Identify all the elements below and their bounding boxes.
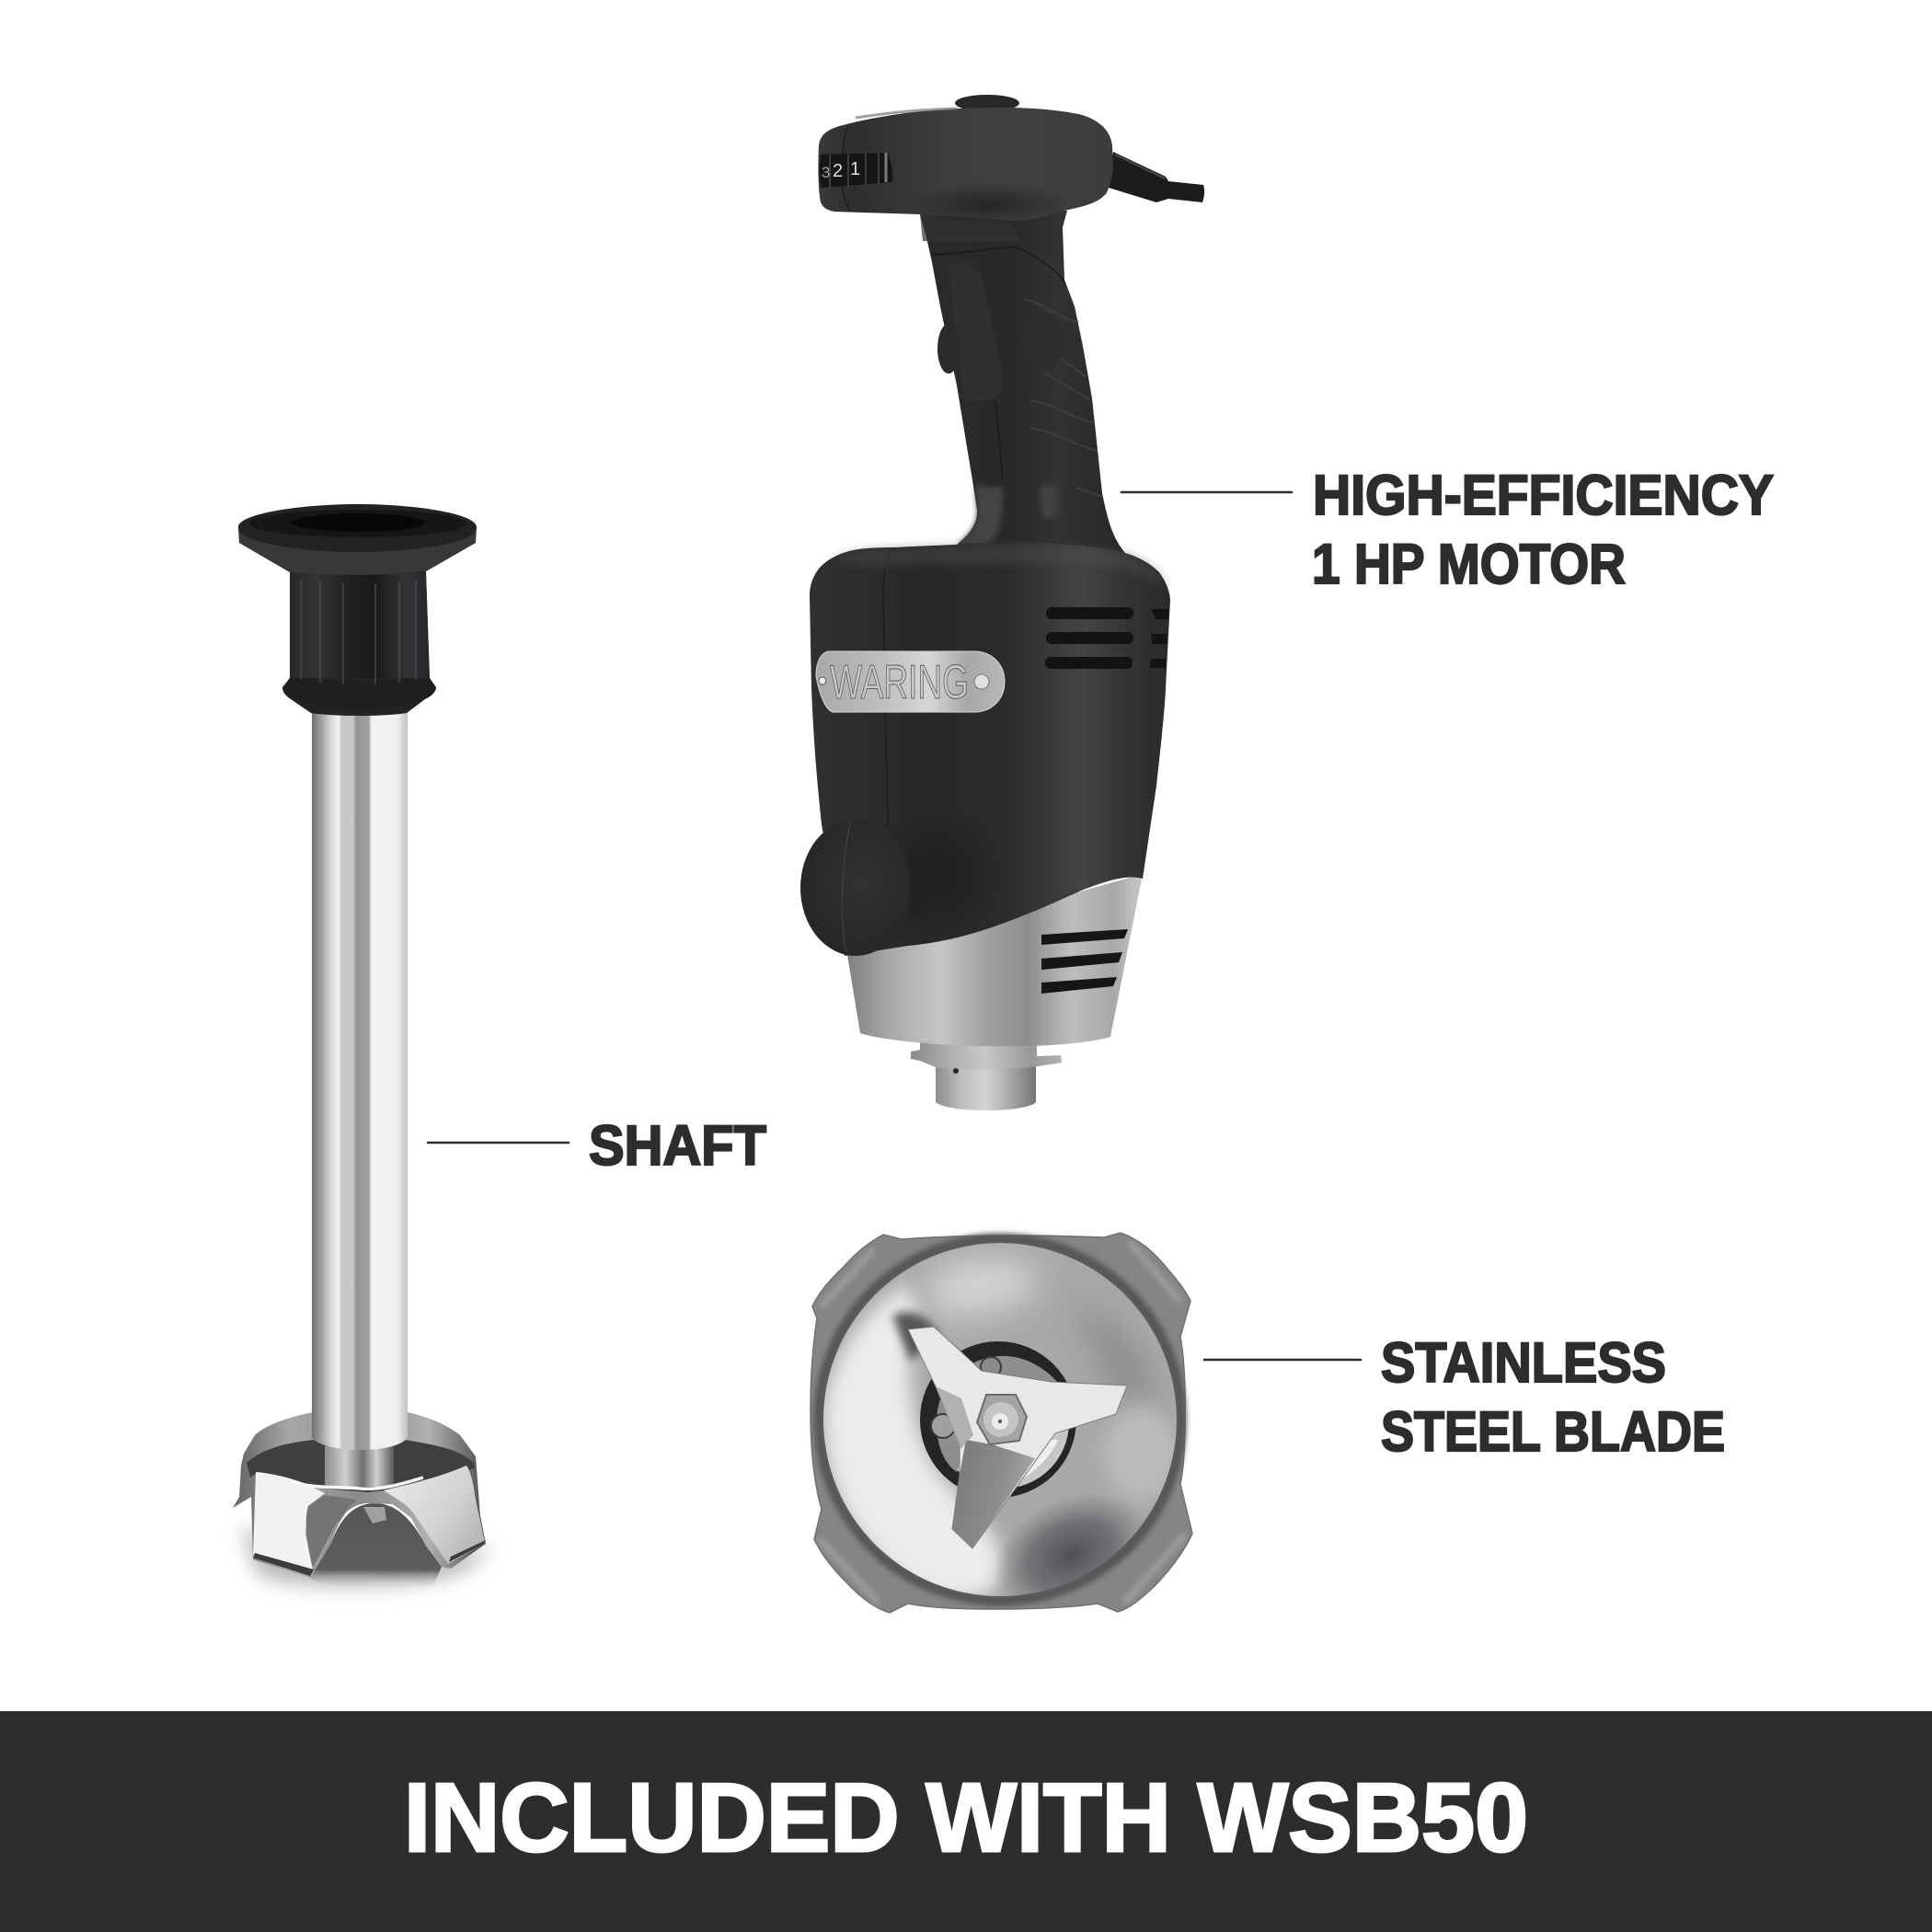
callout line: blade — [1204, 1359, 1361, 1361]
label: shaft: SHAFT — [589, 1114, 766, 1177]
blade guard plate — [811, 1233, 1192, 1613]
label: motor: HIGH-EFFICIENCY — [1313, 464, 1774, 526]
hub — [920, 1341, 1076, 1498]
head — [818, 95, 1113, 226]
lower vents — [1041, 929, 1128, 994]
label: blade: STEEL BLADE — [1381, 1400, 1725, 1463]
product: immersion shaft — [233, 504, 492, 1593]
shaft tube — [312, 708, 408, 1450]
speed dial — [820, 153, 892, 188]
footer banner — [0, 1711, 1932, 1932]
speed dial: 3 — [822, 164, 830, 181]
callout line: motor — [1121, 491, 1292, 493]
speed dial: 1 — [850, 159, 860, 179]
guard corner highlights — [819, 1242, 1185, 1603]
hex nut — [977, 1395, 1027, 1444]
product: blade assembly — [811, 1233, 1192, 1641]
callout line: shaft — [428, 1142, 569, 1144]
trigger knob — [937, 324, 960, 374]
steel motor base — [845, 874, 1143, 1110]
Waring nameplate: WARING — [830, 656, 969, 709]
label: motor — [1312, 464, 1774, 595]
speed dial: 2 — [833, 161, 843, 181]
label: blade: STAINLESS — [1381, 1331, 1666, 1394]
dish rim — [820, 1239, 1180, 1600]
locking knob — [800, 820, 929, 956]
collar and coupling — [936, 1063, 1036, 1110]
brushed dish — [823, 1243, 1177, 1596]
label: motor: 1 HP MOTOR — [1312, 533, 1626, 595]
banner title: INCLUDED WITH WSB50 — [404, 1764, 1528, 1872]
side button — [1020, 315, 1064, 370]
shaft coupling: flange and grip — [238, 504, 477, 716]
shaft blade guard — [233, 1412, 486, 1593]
three-arm blade — [908, 1327, 1127, 1548]
handle and grip — [920, 210, 1125, 553]
label: blade — [1381, 1331, 1725, 1463]
motor housing — [810, 543, 1170, 956]
power cord — [1109, 152, 1204, 202]
shaft floor shadow — [241, 1527, 492, 1587]
upper vents — [1045, 607, 1168, 669]
product: motor unit — [800, 95, 1204, 1110]
